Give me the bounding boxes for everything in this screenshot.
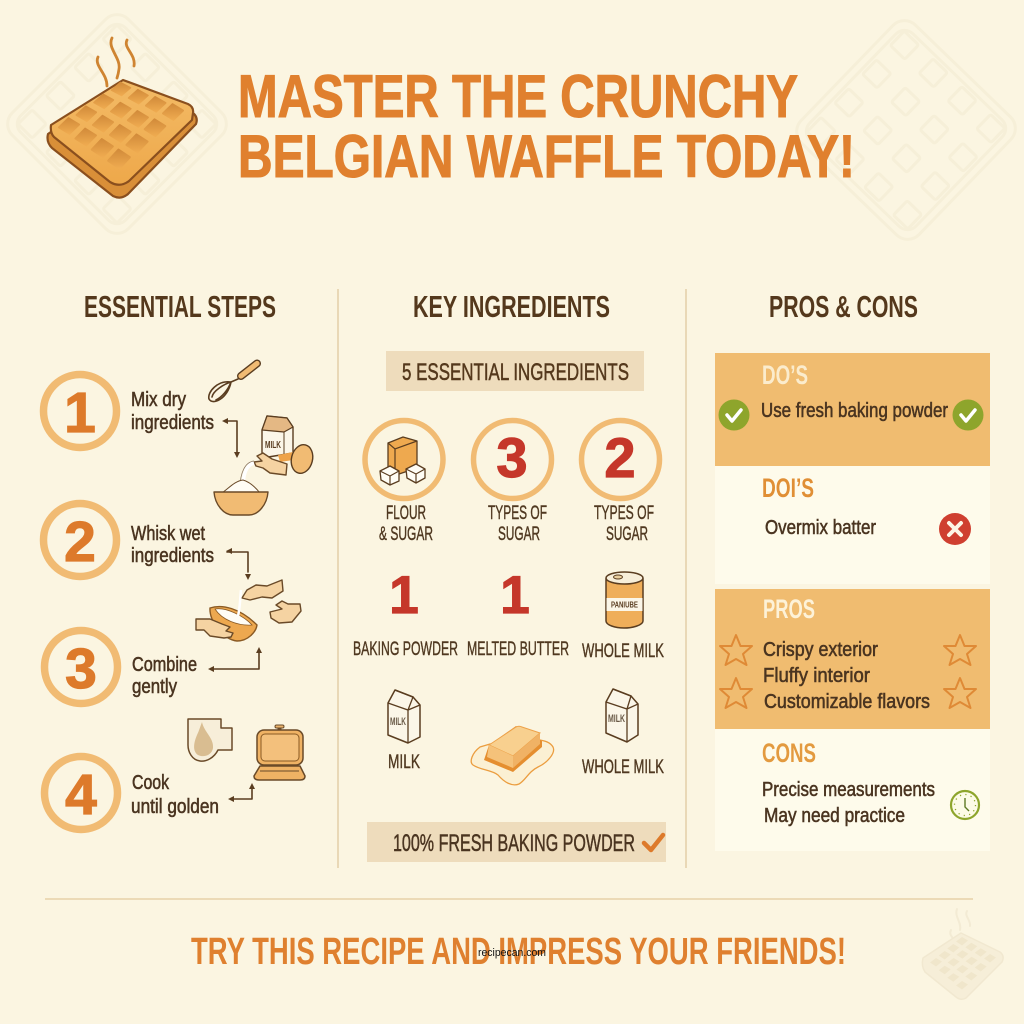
step 3 text: gently [132, 676, 177, 698]
panel: do's: DO’S [762, 360, 808, 390]
step 1 text [131, 389, 214, 434]
step 1 text: ingredients [131, 412, 214, 434]
ingredient: baking powder [353, 566, 458, 660]
ingredient: 3 types of sugar: 3 [496, 426, 528, 489]
panel: pros [715, 589, 990, 729]
ingredient: 2 types of sugar: 2 [604, 426, 636, 489]
panel: pros: Crispy exterior [763, 639, 878, 661]
panel: cons: May need practice [764, 805, 905, 827]
arrow: step 2 [226, 548, 251, 580]
ingredient: milk carton: MILK [390, 716, 406, 728]
title: MASTER THE CRUNCHY [238, 63, 798, 130]
icon: pouring milk carton, hand, egg and bowl: MILK [265, 440, 281, 451]
step 4 text: until golden [131, 796, 219, 818]
ingredient: flour and sugar [365, 420, 443, 545]
ingredient: whole milk carton: WHOLE MILK [582, 757, 664, 778]
icon: waffle iron [254, 725, 305, 780]
panel: do's: Use fresh baking powder [761, 400, 948, 422]
ingredient: whole milk can: PANIUBE [611, 600, 638, 610]
ingredient: melted butter label: 1 [500, 566, 530, 625]
panel: pros and cons [715, 353, 990, 851]
background waffle pattern left [1, 8, 233, 240]
ingredient: whole milk carton: MILK [608, 713, 625, 725]
arrow: step 3 [208, 647, 262, 672]
icon: faint waffle [922, 909, 1003, 999]
ingredient: melted butter label: MELTED BUTTER [467, 639, 569, 660]
step 4 text [131, 772, 219, 818]
column dividers [337, 289, 687, 868]
step 2 text [131, 523, 214, 567]
ingredient: milk carton [388, 690, 420, 773]
ingredient: 3 types of sugar: TYPES OF [488, 503, 547, 524]
icon: whisk [209, 364, 257, 402]
step 4 badge: 4 [65, 763, 97, 827]
panel: don'ts [715, 466, 990, 584]
title [238, 63, 855, 190]
ingredient: flour and sugar: FLOUR [386, 503, 426, 524]
panel: pros: PROS [763, 594, 815, 624]
step 4 text: Cook [132, 772, 170, 794]
step 2 text: ingredients [131, 545, 214, 567]
ingredient: baking powder: BAKING POWDER [353, 639, 458, 660]
ingredient: 2 types of sugar [582, 420, 660, 545]
arrow: step 1 [222, 418, 240, 458]
heading: key ingredients: KEY INGREDIENTS [413, 289, 610, 324]
panel: key ingredients [353, 351, 666, 862]
step 1 badge [44, 374, 116, 448]
ingredient: melted butter label [467, 566, 569, 660]
ingredient: 2 types of sugar: TYPES OF [594, 503, 654, 524]
watermark: recipecan.com: recipecan.com [478, 947, 546, 959]
heading: essential steps: ESSENTIAL STEPS [84, 289, 276, 324]
panel: essential steps [44, 364, 316, 830]
ingredient: whole milk carton [582, 689, 664, 778]
step 2 badge [44, 504, 116, 576]
step 2 badge: 2 [64, 510, 96, 574]
step 1 text: Mix dry [131, 389, 186, 411]
banner: 5 essential ingredients [386, 351, 644, 391]
banner: 5 essential ingredients: 5 ESSENTIAL INGREDIENTS [402, 359, 629, 386]
banner: 100% fresh baking powder [367, 822, 666, 862]
icon: melted butter [471, 726, 554, 785]
title: BELGIAN WAFFLE TODAY! [238, 123, 855, 190]
ingredient: 2 types of sugar: SUGAR [606, 524, 648, 545]
panel: don'ts: Overmix batter [765, 517, 876, 539]
step 3 badge [44, 630, 118, 704]
step 3 text: Combine [132, 654, 197, 676]
ingredient: milk carton: MILK [388, 752, 420, 773]
step 1 badge: 1 [64, 381, 96, 445]
panel: pros: Fluffy interior [763, 665, 870, 687]
ingredient: 3 types of sugar [474, 420, 552, 545]
background waffle pattern right [790, 14, 1022, 246]
ingredient: whole milk can: WHOLE MILK [582, 641, 664, 662]
footer divider [45, 898, 973, 900]
icon: pouring milk carton, hand, egg and bowl [214, 416, 316, 515]
step 3 badge: 3 [65, 637, 97, 701]
ingredient: whole milk can [582, 572, 664, 662]
ingredient: 3 types of sugar: SUGAR [498, 524, 540, 545]
panel: pros: Customizable flavors [764, 691, 930, 713]
step 4 badge [44, 756, 118, 830]
icon: batter jug [188, 719, 232, 761]
icon: steaming waffle [48, 38, 197, 198]
heading: pros and cons: PROS & CONS [769, 289, 918, 324]
icon: hands whisking in bowl [196, 580, 301, 641]
panel: cons: CONS [762, 738, 816, 768]
ingredient: baking powder: 1 [389, 566, 419, 625]
panel: do's [715, 353, 990, 466]
banner: 100% fresh baking powder: 100% FRESH BAKING POWDER [393, 830, 635, 857]
step 2 text: Whisk wet [131, 523, 205, 545]
panel: don'ts: DOI’S [762, 473, 814, 503]
arrow: step 4 [228, 783, 255, 802]
panel: cons: Precise measurements [762, 779, 935, 801]
step 3 text [132, 654, 197, 698]
ingredient: flour and sugar: & SUGAR [379, 524, 433, 545]
panel: cons [715, 729, 990, 851]
